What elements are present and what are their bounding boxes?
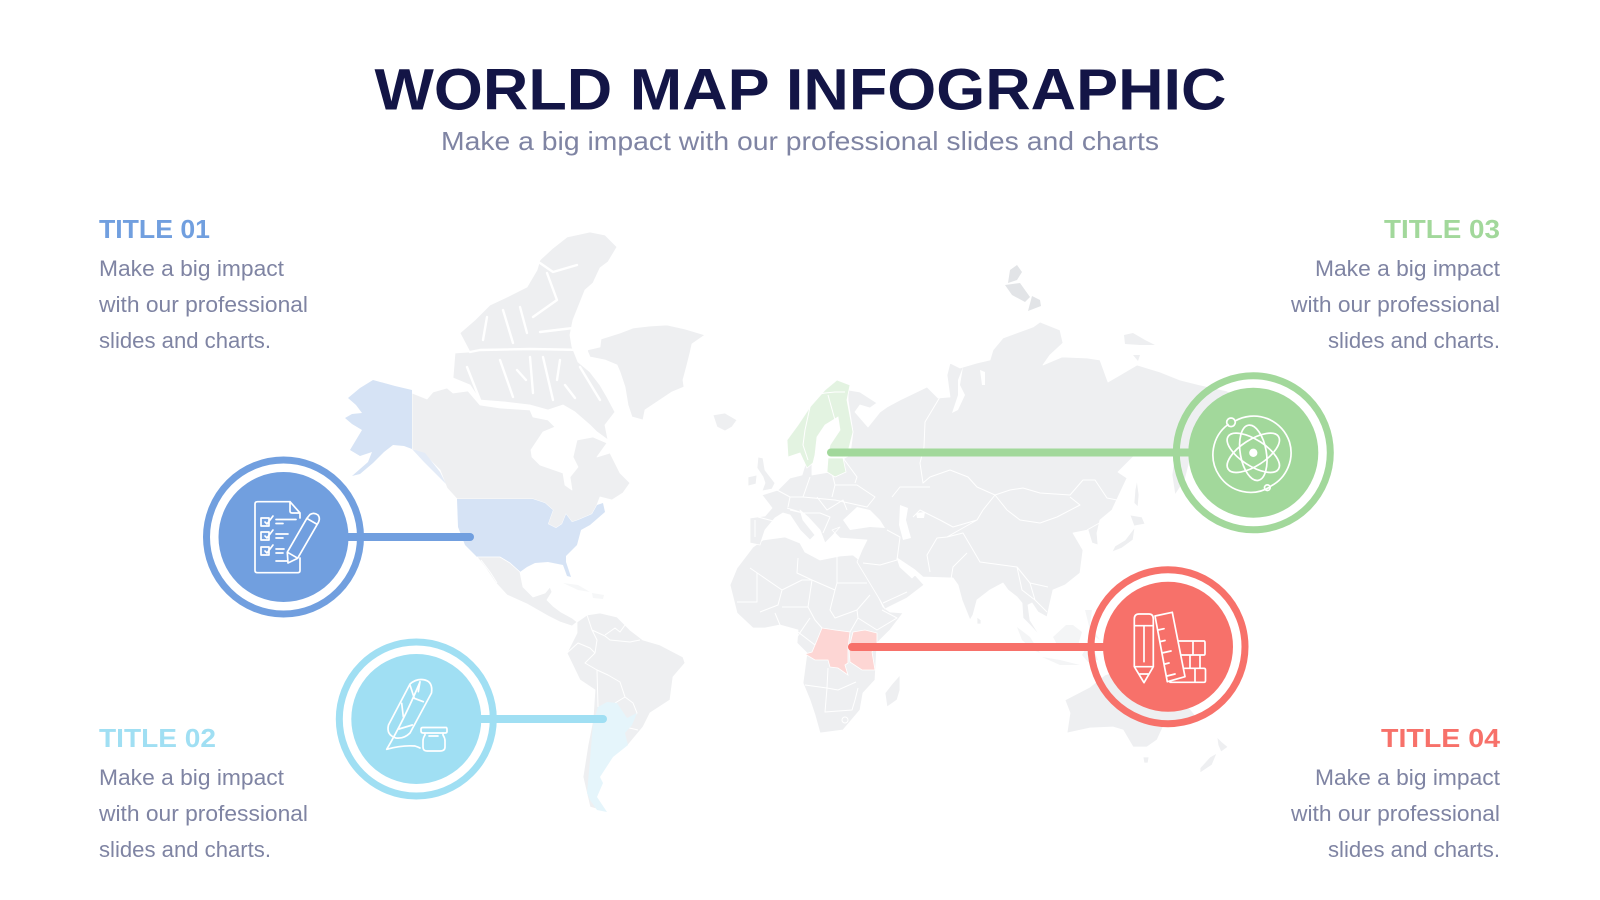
text block: title 03: Make a big impact — [1315, 256, 1500, 281]
text block: title 04 — [1290, 723, 1501, 862]
map: Caribbean islands — [563, 583, 604, 599]
text block: title 03: TITLE 03 — [1384, 214, 1500, 244]
text block: title 01: Make a big impact — [99, 256, 284, 281]
text block: title 04: with our professional — [1290, 801, 1500, 826]
badge: title 03 atom — [1176, 376, 1330, 530]
map: Svalbard and Novaya Zemlya — [1005, 265, 1041, 311]
text block: title 02: TITLE 02 — [99, 723, 216, 753]
icon: quill and ink jar — [387, 680, 447, 751]
text block: title 02: slides and charts. — [99, 837, 271, 862]
map: United Kingdom — [757, 457, 775, 491]
text block: title 01 — [98, 214, 308, 353]
badge: title 01 checklist — [206, 460, 360, 614]
map: Southeast Asian islands — [1017, 610, 1170, 675]
map: Severnaya Zemlya — [1124, 333, 1155, 361]
map: Madagascar — [885, 675, 900, 707]
connector line: title 02 — [470, 715, 603, 723]
map: Argentina highlighted — [587, 702, 637, 812]
connector line: title 04 — [852, 643, 1115, 651]
title: WORLD MAP INFOGRAPHIC — [374, 58, 1226, 122]
map: DR Congo highlighted — [805, 628, 850, 675]
map: Tanzania and Uganda highlighted — [849, 630, 877, 670]
map: Canada — [412, 388, 630, 528]
map: Sri Lanka — [977, 617, 981, 624]
map: Iceland — [713, 413, 737, 431]
map: Greenland — [587, 325, 705, 420]
map: Africa — [730, 537, 903, 733]
map: Ireland — [748, 475, 757, 486]
text block: title 03 — [1290, 214, 1500, 353]
text block: title 02: with our professional — [98, 801, 308, 826]
map: Alaska highlighted — [345, 380, 412, 476]
text block: title 01: TITLE 01 — [99, 214, 210, 244]
connector line: title 03 — [831, 448, 1200, 456]
map: Alaska panhandle — [412, 449, 446, 484]
text block: title 03: slides and charts. — [1328, 328, 1500, 353]
map: Scandinavia highlighted — [787, 380, 853, 468]
icon: checklist and pencil — [255, 502, 319, 573]
map: Baltic states highlighted — [827, 458, 846, 477]
map: South America — [567, 613, 685, 812]
icon: atom — [1213, 416, 1291, 492]
badge: title 04 pencil and ruler — [1091, 570, 1245, 724]
text block: title 04: slides and charts. — [1328, 837, 1500, 862]
map: Sakhalin and Japan — [1112, 480, 1145, 552]
text block: title 04: Make a big impact — [1315, 765, 1500, 790]
map: South American borders — [567, 615, 645, 730]
map: inland seas — [843, 367, 985, 540]
connector line: title 01 — [340, 533, 470, 541]
world map — [345, 232, 1290, 812]
text block: title 04: TITLE 04 — [1381, 723, 1501, 753]
map: Canadian Arctic islands — [453, 232, 617, 440]
map: African borders — [737, 555, 897, 712]
badge: title 02 quill — [339, 642, 493, 796]
text block: title 02 — [98, 723, 308, 862]
map: New Zealand — [1200, 737, 1228, 773]
map: Baja gulf — [481, 560, 497, 583]
text block: title 01: with our professional — [98, 292, 308, 317]
map: Eurasia — [750, 322, 1290, 636]
map: Australia — [1065, 665, 1195, 747]
icon: pencil, ruler and bricks — [1134, 612, 1206, 683]
text block: title 03: with our professional — [1290, 292, 1500, 317]
map: Tasmania — [1143, 757, 1149, 763]
map: Scandinavian borders — [803, 392, 845, 460]
text block: title 02: Make a big impact — [99, 765, 284, 790]
map: Eurasian borders — [755, 397, 1117, 612]
text block: title 01: slides and charts. — [99, 328, 271, 353]
subtitle: Make a big impact with our professional slides and charts — [441, 126, 1159, 156]
map: USA highlighted — [457, 499, 605, 577]
map: Mexico and Central America — [477, 557, 577, 626]
